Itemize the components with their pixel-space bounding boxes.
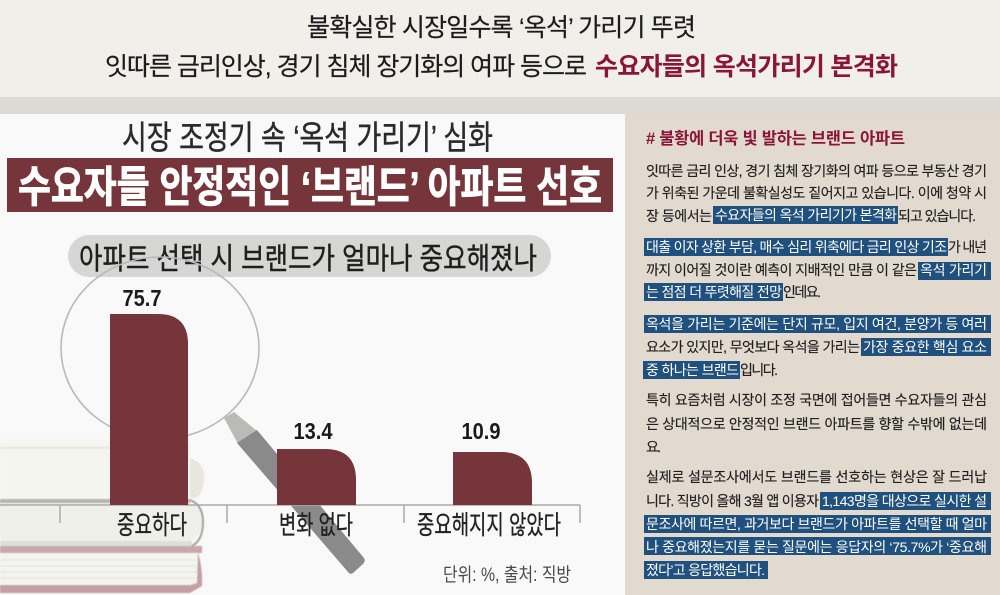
paragraph 2: 가 내년 [948,239,987,255]
banner: 수요자들 안정적인 ‘브랜드’ 아파트 선호 [18,164,602,212]
chart subtitle pill: 아파트 선택 시 브랜드가 얼마나 중요해졌나 [79,243,537,276]
paragraph 5: 실제로 설문조사에서도 브랜드를 선호하는 현상은 잘 드러납 [646,469,987,485]
panel: article [625,114,1000,595]
paragraph 5 [644,469,991,579]
chart heading: 시장 조정기 속 ‘옥석 가리기’ 심화 [122,119,493,156]
source note: 단위: %, 출처: 직방 [443,564,571,586]
title line 2: 잇따른 금리인상, 경기 침체 장기화의 여파 등으로 [105,53,587,81]
paragraph 1: 장 등에서는 [646,208,712,224]
paragraph 3: 옥석을 가리는 기준에는 단지 규모, 입지 여건, 분양가 등 여러 [646,316,987,332]
header: title [105,14,898,81]
bar: 중요하다 [110,285,188,540]
paragraph 2: 인데요. [783,284,821,300]
axis [0,505,580,523]
paragraph 2 [644,238,991,301]
paragraph 5: 1,143명을 대상으로 실시한 설 [822,493,987,509]
paragraph 3: 가장 중요한 핵심 요소 [863,339,987,355]
chart subtitle pill [68,235,551,277]
article heading: # 불황에 더욱 빛 발하는 브랜드 아파트 [646,129,905,148]
bar: 중요해지지 않았다: 중요해지지 않았다 [417,510,561,540]
bar: 중요해지지 않았다 [417,418,561,540]
paragraph 5: 문조사에 따르면, 과거보다 브랜드가 아파트를 선택할 때 얼마 [646,516,987,532]
paragraph 2: 옥석 가리기 [920,262,987,278]
paragraph 2: 는 점점 더 뚜렷해질 전망 [646,284,782,300]
bar: 중요해지지 않았다: 10.9 [462,418,500,444]
paragraph 1: 가 위축된 가운데 불확실성도 짙어지고 있습니다. 이에 청약 시 [646,185,987,201]
paragraph 4: 요. [646,439,661,455]
paragraph 1 [646,163,987,224]
paragraph 2: 까지 이어질 것이란 예측이 지배적인 만큼 이 같은 [646,262,917,278]
paragraph 2: 대출 이자 상환 부담, 매수 심리 위축에다 금리 인상 기조 [646,239,947,255]
paragraph 3: 중 하나는 브랜드 [646,362,739,378]
bar: 변화 없다: 13.4 [294,418,333,444]
paragraph 1: 수요자들의 옥석 가리기가 본격화 [715,207,897,223]
icon: magnifier [61,257,365,574]
icon: stacked books [0,436,204,593]
bar: 중요하다: 75.7 [122,285,162,311]
bar: 중요하다: 중요하다 [117,510,187,540]
paragraph 3: 입니다. [740,362,778,378]
paragraph 1: 잇따른 금리 인상, 경기 침체 장기화의 여파 등으로 부동산 경기 [646,163,987,179]
bar chart [0,285,580,540]
paragraph 1: 되고 있습니다. [898,208,976,224]
title highlight: 수요자들의 옥석가리기 본격화 [595,53,898,81]
paragraph 5: 니다. 직방이 올해 3월 앱 이용자 [646,493,819,509]
bar: 변화 없다: 변화 없다 [279,510,353,540]
paragraph 5: 나 중요해졌는지를 묻는 질문에는 응답자의 ‘75.7%가 ‘중요해 [646,539,987,555]
title line 1: 불확실한 시장일수록 ‘옥석’ 가리기 뚜렷 [307,14,696,42]
paragraph 3: 요소가 있지만, 무엇보다 옥석을 가리는 [646,339,860,355]
paragraph 4: 은 상대적으로 안정적인 브랜드 아파트를 향할 수밖에 없는데 [646,416,987,432]
paragraph 4 [646,392,987,455]
panel: chart image [0,114,625,595]
paragraph 5: 졌다’고 응답했습니다. [646,562,765,578]
paragraph 4: 특히 요즘처럼 시장이 조정 국면에 접어들면 수요자들의 관심 [646,392,987,408]
paragraph 3 [643,315,991,379]
bar: 변화 없다 [277,418,356,540]
